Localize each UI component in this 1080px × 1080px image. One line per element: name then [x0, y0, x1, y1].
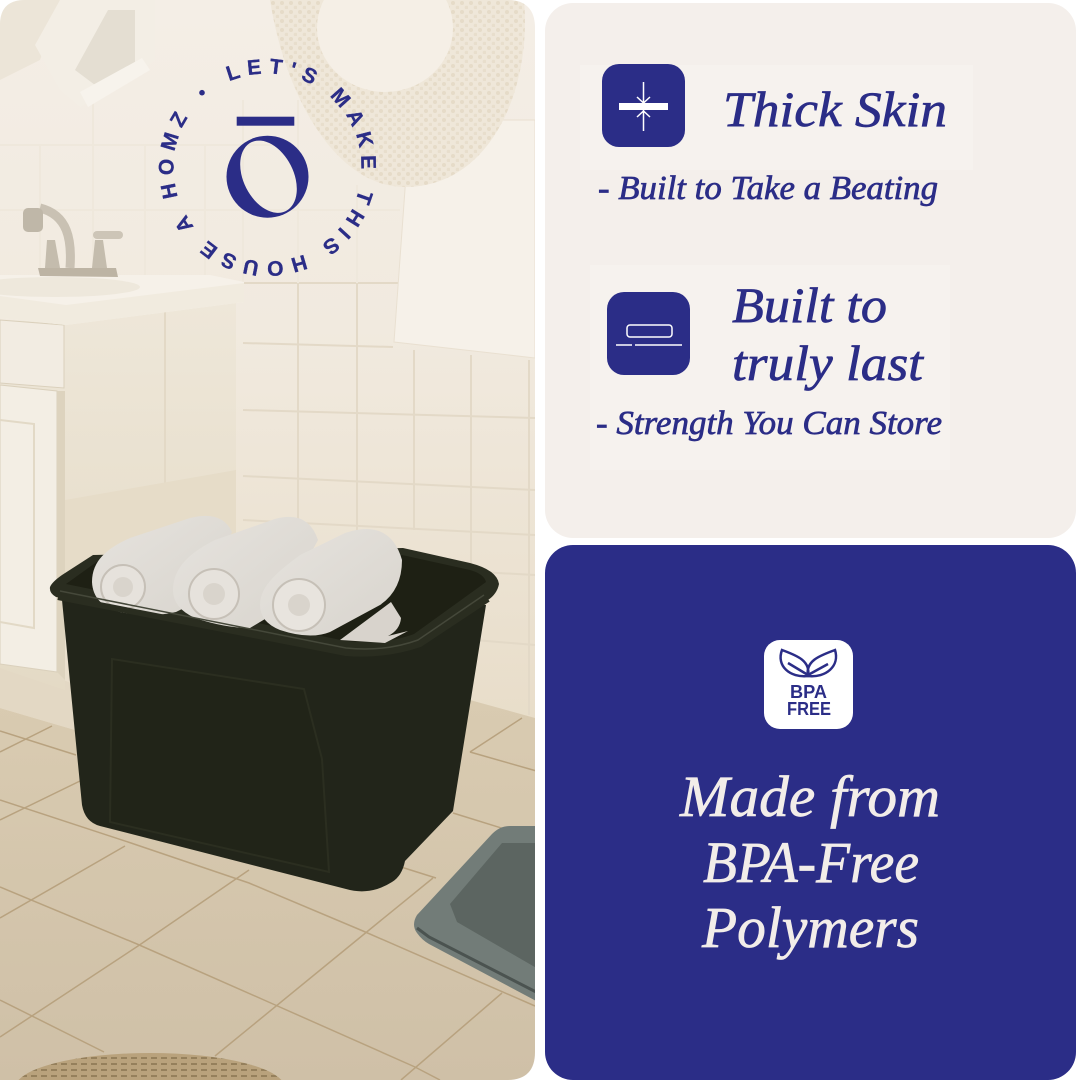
floor tiles	[0, 700, 540, 1080]
wall tiles	[0, 0, 535, 730]
circular brand logo	[158, 58, 376, 276]
faucet	[23, 208, 123, 277]
subheading: strength you can store: - Strength You Can Store	[596, 405, 942, 442]
hanging towel	[394, 120, 535, 358]
rolled towel left	[92, 516, 232, 615]
panel: bathroom photo with storage bin	[0, 0, 535, 1080]
heading: made from BPA-free polymers: Made from	[679, 764, 940, 829]
heading: made from BPA-free polymers: BPA-Free	[703, 830, 919, 895]
knitted sun hat	[270, 0, 525, 187]
basket on wall	[0, 0, 135, 106]
circular slogan text: LET'S MAKE THIS HOUSE A HOMZ	[158, 58, 376, 276]
panel: BPA free	[545, 545, 1076, 1080]
logo mark: macron and O	[226, 117, 308, 218]
icon: BPA free badge: BPA	[790, 682, 827, 702]
icon: BPA free badge: FREE	[787, 699, 831, 719]
heading: built to truly last: truly last	[732, 335, 924, 391]
rolled towel right	[260, 529, 402, 636]
heading: made from BPA-free polymers	[679, 764, 940, 960]
slogan dot	[199, 90, 205, 95]
heading: built to truly last	[732, 277, 924, 391]
icon: BPA free badge	[764, 640, 853, 729]
rolled towel middle	[173, 517, 318, 628]
icon: thick skin	[602, 64, 685, 147]
grey lid	[414, 826, 540, 1003]
heading: made from BPA-free polymers: Polymers	[701, 895, 919, 960]
icon: built to last	[607, 292, 690, 375]
woven rug	[15, 1053, 285, 1080]
black storage bin	[50, 516, 499, 891]
subheading: built to take a beating: - Built to Take a Beating	[598, 170, 938, 207]
panel: product features	[545, 3, 1076, 538]
vanity cabinet	[0, 275, 244, 680]
heading: thick skin: Thick Skin	[723, 81, 947, 137]
rolled towel under	[340, 602, 408, 643]
heading: built to truly last: Built to	[732, 277, 887, 333]
